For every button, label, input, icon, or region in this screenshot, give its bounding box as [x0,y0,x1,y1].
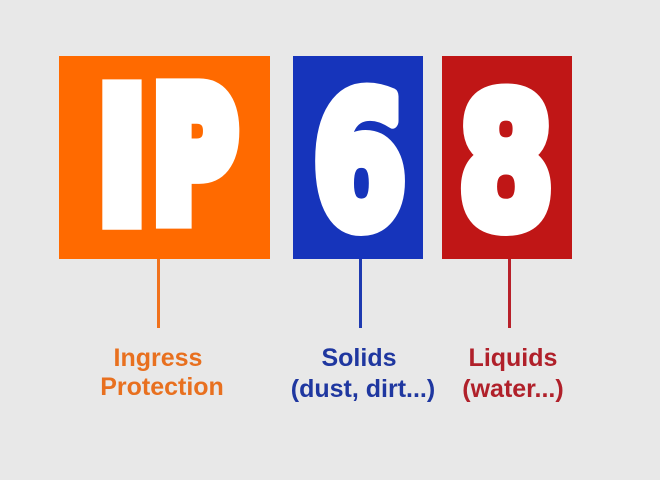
label: Liquids (water...): (water...) [462,375,564,403]
connector: orange line [157,259,160,328]
label: Ingress Protection: Ingress [114,344,202,372]
connector: blue line [359,259,362,328]
digit 6: 6 [313,56,406,269]
label: Solids (dust, dirt...): Solids [321,344,397,372]
label: Ingress Protection [100,344,224,401]
label: Liquids (water...) [462,344,564,403]
panel: IP orange block [59,51,270,267]
label: Liquids (water...): Liquids [469,344,557,372]
panel: 8 red block [442,56,572,268]
letter I: I [95,51,149,267]
letter P: P [152,55,237,261]
label: Ingress Protection: Protection [100,373,224,401]
panel: 6 blue block [293,56,423,269]
label: Solids (dust, dirt...) [291,344,435,403]
connector: red line [508,259,511,328]
label: Solids (dust, dirt...): (dust, dirt...) [291,375,435,403]
digit 8: 8 [459,57,553,268]
